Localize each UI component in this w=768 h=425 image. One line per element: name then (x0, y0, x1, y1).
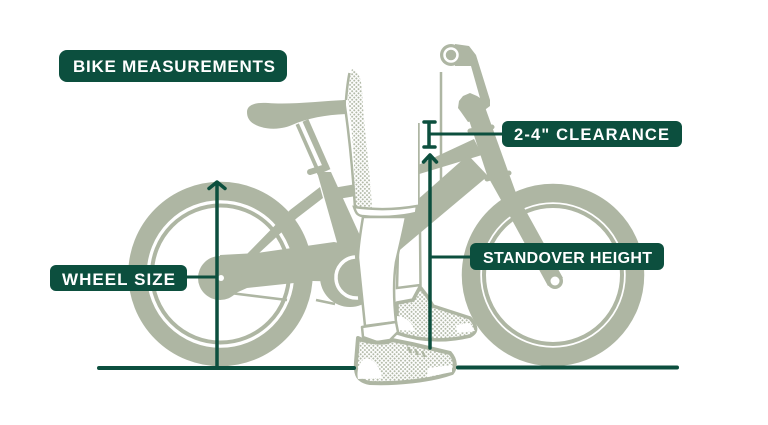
handlebar stem (455, 44, 490, 122)
thigh stipple (348, 69, 372, 208)
front wheel (471, 193, 635, 357)
sock (362, 322, 398, 342)
fork (487, 171, 563, 286)
grip (440, 44, 462, 66)
far shoe (397, 287, 476, 340)
chainring (320, 247, 380, 307)
seat tube (317, 172, 362, 262)
ground line (99, 366, 677, 370)
laces (408, 347, 425, 357)
bike frame (198, 107, 563, 300)
wheel size label (50, 265, 187, 291)
down tube (372, 155, 488, 254)
top tube front (416, 139, 482, 175)
near shoe (356, 338, 455, 383)
head tube (468, 107, 509, 178)
seat stay (247, 187, 323, 254)
title label (59, 50, 287, 82)
wheel size arrow (187, 182, 225, 368)
head collars (470, 127, 509, 179)
wheel size label: WHEEL SIZE (62, 270, 175, 289)
standover height arrow (424, 155, 472, 348)
title label: BIKE MEASUREMENTS (73, 57, 275, 76)
clearance marker (424, 122, 504, 147)
standover height label (470, 243, 664, 270)
saddle (247, 100, 346, 129)
clearance label: 2-4" CLEARANCE (514, 126, 669, 144)
far leg (397, 72, 476, 340)
top tube rear (333, 183, 362, 199)
seat post (302, 122, 324, 172)
rear wheel (138, 191, 304, 357)
shorts hem (354, 206, 417, 217)
bike illustration (138, 44, 635, 357)
clearance label (502, 121, 682, 147)
near leg (344, 68, 455, 383)
chain guard and rear hub (220, 242, 352, 300)
chain (222, 292, 335, 304)
standover height label: STANDOVER HEIGHT (483, 250, 652, 267)
